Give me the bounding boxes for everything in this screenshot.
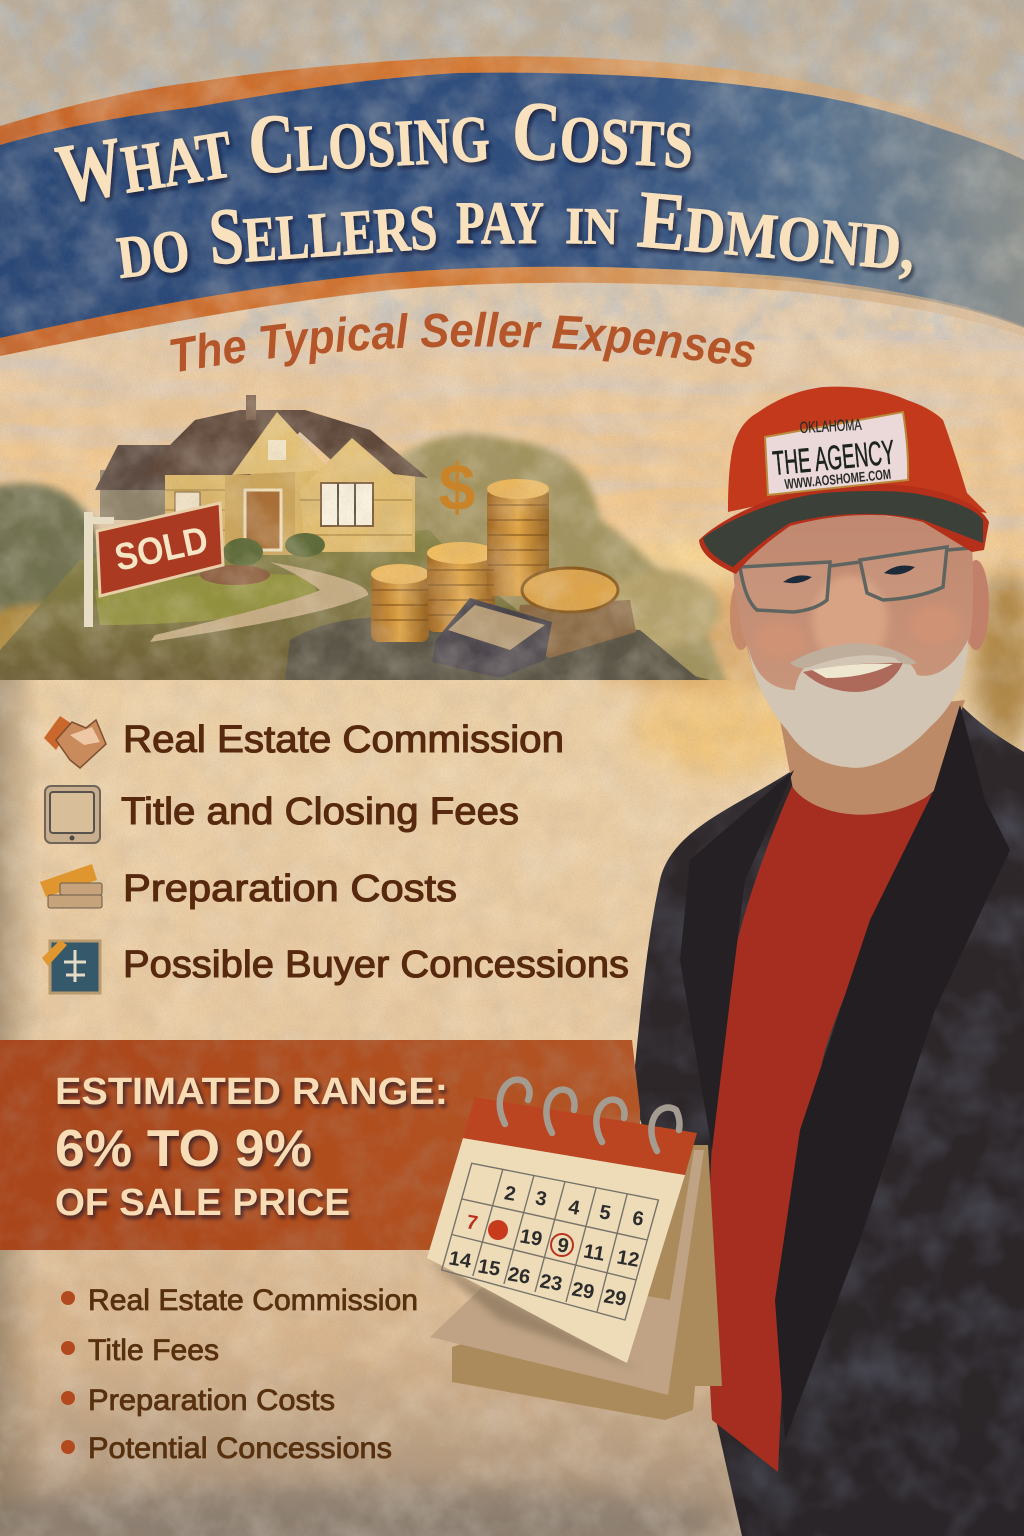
calendar dates: 7 bbox=[465, 1211, 479, 1235]
face bbox=[733, 513, 973, 767]
shrubs bbox=[200, 533, 325, 585]
calendar bbox=[427, 1080, 722, 1420]
lapels bbox=[680, 705, 1010, 1440]
list item: title and closing fees: Title and Closing Fees bbox=[121, 791, 519, 833]
title heading: EDMOND, bbox=[634, 173, 919, 288]
list item: real estate commission: Real Estate Commission bbox=[123, 719, 564, 761]
list item: preparation costs: Preparation Costs bbox=[123, 868, 457, 910]
neck bbox=[780, 700, 965, 835]
calendar dates: 6 bbox=[631, 1207, 645, 1231]
calendar dates: 14 bbox=[447, 1247, 474, 1273]
glasses bbox=[740, 547, 972, 612]
rings bbox=[500, 1080, 680, 1151]
list item: possible buyer concessions: Possible Buyer Concessions bbox=[123, 944, 629, 986]
smile bbox=[803, 663, 903, 692]
red shirt bbox=[708, 786, 934, 1472]
bullet list: Potential Concessions bbox=[88, 1432, 392, 1465]
title heading: PAY bbox=[456, 190, 544, 256]
title heading: DO bbox=[114, 217, 193, 291]
calendar dates: 26 bbox=[506, 1263, 532, 1289]
estimated range band bbox=[0, 1040, 640, 1250]
dollar sign: $ bbox=[439, 450, 475, 524]
hat license plate: WWW.AOSHOME.COM bbox=[784, 466, 892, 492]
title heading: COSTS bbox=[510, 84, 696, 186]
jacket bbox=[632, 704, 1024, 1536]
top orange brush stripe bbox=[0, 56, 1024, 166]
calendar dates: 11 bbox=[582, 1240, 606, 1266]
calendar dates: 29 bbox=[570, 1278, 596, 1304]
title heading bbox=[50, 84, 919, 291]
hat bbox=[699, 387, 989, 574]
calendar grid bbox=[442, 1163, 658, 1320]
calendar dates bbox=[447, 1182, 645, 1311]
title banner bbox=[0, 73, 1024, 356]
title heading: CLOSING bbox=[246, 86, 492, 192]
hat license plate bbox=[765, 412, 908, 495]
coin stacks bbox=[371, 479, 549, 642]
icon: tablet bbox=[45, 786, 100, 843]
calendar dates: 2 bbox=[503, 1182, 517, 1206]
trees and background hills bbox=[0, 434, 730, 700]
estimated range text bbox=[55, 1071, 448, 1224]
house bbox=[95, 395, 428, 555]
subtitle: The Typical Seller Expenses bbox=[170, 312, 755, 372]
calendar dates: 23 bbox=[538, 1270, 564, 1296]
calendar dates: 15 bbox=[476, 1255, 502, 1281]
back pages bbox=[427, 1145, 722, 1420]
icon: handshake bbox=[44, 716, 106, 768]
rock foreground bbox=[285, 618, 700, 680]
hat license plate: THE AGENCY bbox=[771, 433, 896, 483]
estimated range text: OF SALE PRICE bbox=[55, 1182, 350, 1224]
eyes bbox=[783, 565, 915, 583]
bullet list: Real Estate Commission bbox=[88, 1284, 418, 1317]
SOLD sign bbox=[84, 503, 223, 627]
lawn bbox=[0, 530, 710, 680]
landscape illustration: house, sold sign, coins bbox=[0, 395, 730, 700]
bullet list bbox=[61, 1284, 418, 1465]
SOLD sign: SOLD bbox=[111, 519, 212, 580]
calendar dates: 29 bbox=[602, 1285, 628, 1311]
calendar dates: 3 bbox=[534, 1187, 548, 1211]
money pile and book bbox=[432, 568, 636, 678]
estimated range text: ESTIMATED RANGE: bbox=[55, 1071, 448, 1113]
calendar dates: 9 bbox=[556, 1234, 570, 1258]
calendar dates: 5 bbox=[598, 1201, 612, 1225]
ears bbox=[730, 560, 989, 650]
top page bbox=[427, 1138, 685, 1363]
icon: folders bbox=[40, 864, 102, 908]
bullet list: Title Fees bbox=[88, 1334, 219, 1367]
estimated range text: 6% TO 9% bbox=[55, 1120, 312, 1178]
calendar dates: 19 bbox=[518, 1225, 544, 1251]
bullet list: Preparation Costs bbox=[88, 1384, 335, 1417]
header bbox=[463, 1097, 697, 1175]
title heading: SELLERS bbox=[206, 178, 440, 282]
calendar dates: 4 bbox=[567, 1196, 582, 1220]
hat license plate: OKLAHOMA bbox=[799, 417, 862, 437]
beard bbox=[748, 640, 968, 768]
title heading: WHAT bbox=[50, 103, 238, 222]
calendar dates: 12 bbox=[615, 1246, 641, 1272]
title heading: IN bbox=[565, 198, 619, 256]
man portrait bbox=[630, 387, 1024, 1536]
icon: concessions document bbox=[42, 940, 100, 993]
